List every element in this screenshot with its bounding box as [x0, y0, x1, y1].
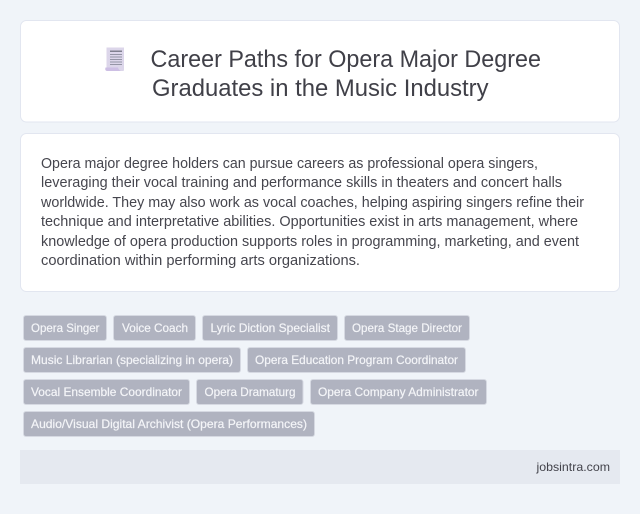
tag: Opera Stage Director: Opera Stage Director	[352, 321, 462, 335]
tag: Vocal Ensemble Coordinator: Vocal Ensemble Coordinator	[31, 385, 182, 399]
tag: Opera Dramaturg	[196, 380, 303, 404]
footer source text: jobsintra.com	[535, 460, 610, 474]
description text: coordination within performing arts organizations.	[41, 253, 360, 269]
tag: Opera Education Program Coordinator	[248, 348, 466, 372]
tag: Audio/Visual Digital Archivist	[24, 412, 314, 436]
description text: technique and interpretative abilities. Opportunities exist in arts management, where	[41, 214, 578, 230]
title: Career Paths for Opera Major Degree	[150, 46, 541, 73]
tag: Lyric Diction Specialist: Lyric Diction Specialist	[210, 321, 331, 335]
header panel	[20, 20, 620, 122]
title	[150, 46, 541, 102]
tag: Voice Coach: Voice Coach	[122, 321, 188, 335]
description text: leveraging their vocal training and performance skills in theaters and concert halls	[41, 175, 562, 191]
icon: scroll document	[105, 48, 124, 71]
description text: worldwide. They may also work as vocal coaches, helping aspiring singers refine their	[40, 195, 584, 211]
tag: Opera Singer	[24, 316, 106, 340]
tag: Music Librarian: Music Librarian (specializing in opera)	[31, 353, 233, 367]
tag: Opera Singer: Opera Singer	[31, 321, 100, 335]
tag: Audio/Visual Digital Archivist: Audio/Visual Digital Archivist (Opera Performances)	[31, 417, 307, 431]
tag: Music Librarian	[24, 348, 240, 372]
description text	[40, 156, 584, 269]
description text: Opera major degree holders can pursue careers as professional opera singers,	[41, 156, 538, 172]
panel: description	[20, 134, 620, 292]
tag: Opera Dramaturg: Opera Dramaturg	[204, 385, 296, 399]
tag: Opera Company Administrator: Opera Company Administrator	[318, 385, 478, 399]
tag: Opera Company Administrator	[310, 380, 486, 404]
tag: Lyric Diction Specialist	[202, 316, 338, 340]
tag: Opera Education Program Coordinator: Opera Education Program Coordinator	[255, 353, 458, 367]
footer bar	[20, 450, 620, 484]
title: Graduates in the Music Industry	[152, 75, 488, 102]
tag: Voice Coach	[114, 316, 196, 340]
tag: Vocal Ensemble Coordinator	[24, 380, 190, 404]
career tags	[24, 316, 486, 436]
tag: Opera Stage Director	[344, 316, 470, 340]
description text: knowledge of opera production supports roles in programming, marketing, and event	[41, 234, 579, 250]
